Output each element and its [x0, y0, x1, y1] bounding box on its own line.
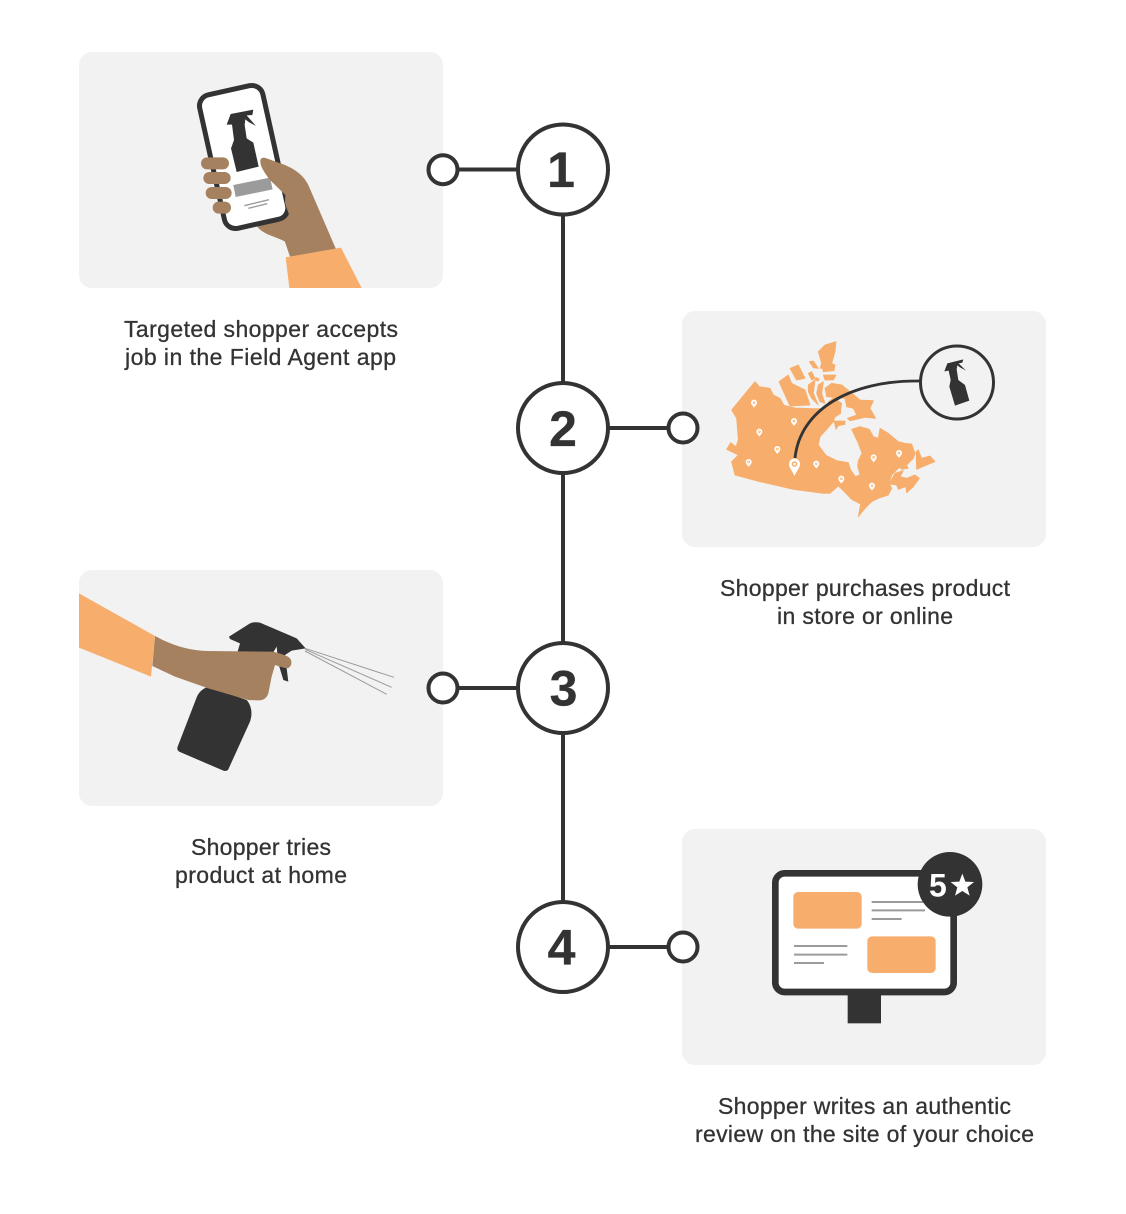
- review text lines: [794, 902, 925, 963]
- caption: step 2: in store or online: [777, 603, 953, 629]
- panel: step 2 Canada map illustration: [682, 311, 1046, 547]
- icon: thumb and palm: [260, 158, 336, 256]
- step 4 marker: 4: [548, 920, 576, 976]
- icon: hand holding phone with spray bottle: [197, 83, 362, 288]
- icon: sleeve: [286, 248, 362, 288]
- caption: step 4: review on the site of your choice: [695, 1121, 1034, 1147]
- icon: monitor: [775, 873, 954, 992]
- caption: step 1: Targeted shopper accepts: [124, 316, 398, 342]
- step 1 marker: 1: [547, 142, 575, 198]
- caption: step 3: [175, 834, 347, 888]
- caption: step 2: Shopper purchases product: [720, 575, 1011, 601]
- step 1 marker: [428, 124, 608, 214]
- product info bar: [233, 178, 273, 197]
- Arctic islands: [779, 342, 876, 429]
- badge: five star rating: [918, 852, 982, 917]
- icon: monitor stand: [848, 993, 881, 1023]
- product text lines: [244, 200, 269, 208]
- icon: fingers: [201, 157, 232, 214]
- caption: step 3: Shopper tries: [191, 834, 331, 860]
- step 2 marker: 2: [549, 401, 577, 457]
- map of Canada: [727, 342, 935, 517]
- badge: five star rating: 5: [929, 868, 947, 904]
- step 4 marker: [518, 902, 698, 992]
- panel: step 4 review monitor illustration: [682, 829, 1046, 1065]
- location pins: [746, 400, 902, 491]
- step 3 marker: [428, 643, 608, 733]
- icon: spray bottle: [177, 622, 306, 771]
- route arc from pin to product: [795, 381, 920, 458]
- caption: step 4: [695, 1093, 1034, 1147]
- panel: step 3 spray bottle illustration: [79, 570, 443, 806]
- step 3 marker: 3: [550, 660, 577, 716]
- Atlantic provinces: [916, 450, 935, 469]
- review image blocks: [793, 892, 936, 973]
- icon: sleeve: [79, 593, 155, 677]
- icon: spray bottle on screen: [227, 110, 259, 172]
- caption: step 4: Shopper writes an authentic: [718, 1093, 1011, 1119]
- timeline spine: [561, 169, 565, 947]
- caption: step 2: [720, 575, 1011, 629]
- caption: step 1: [124, 316, 398, 370]
- icon: circled spray bottle: [920, 346, 994, 419]
- caption: step 1: job in the Field Agent app: [124, 344, 396, 370]
- caption: step 3: product at home: [175, 862, 347, 888]
- panel: step 1 phone illustration: [79, 52, 443, 288]
- icon: arm and hand: [152, 636, 291, 700]
- icon: spray mist lines: [305, 648, 394, 694]
- icon: large location pin: [789, 458, 800, 476]
- step 2 marker: [518, 383, 698, 473]
